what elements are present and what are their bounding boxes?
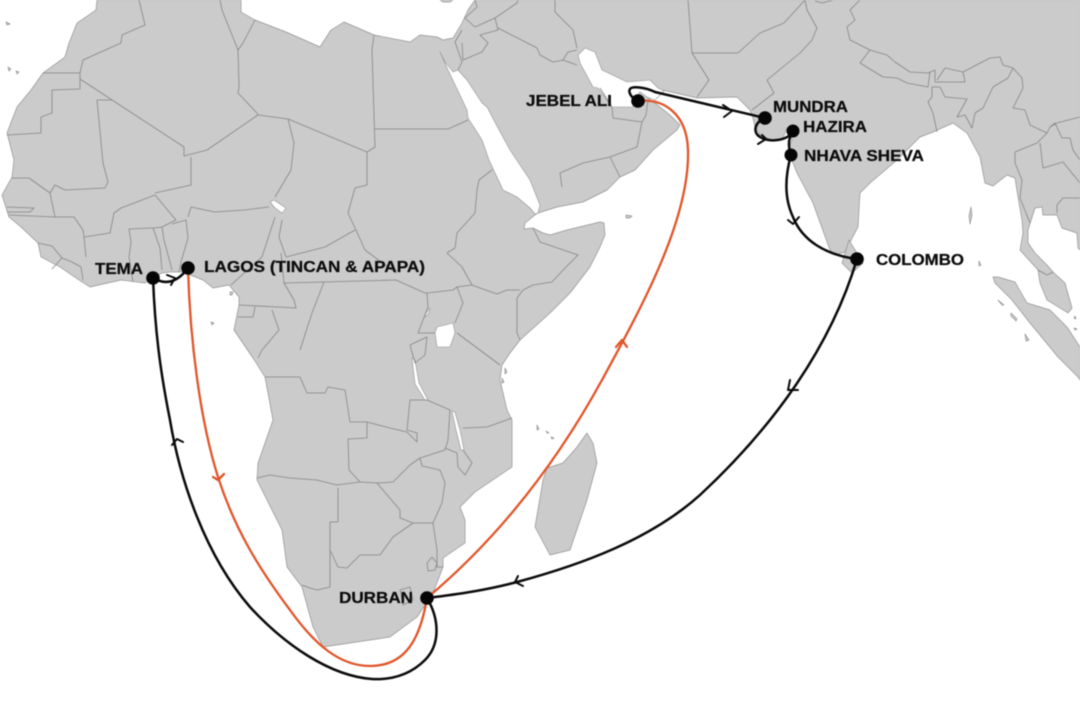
marker: Lagos (181, 261, 195, 275)
sea: Red Sea (440, 52, 540, 214)
route: orange service from Lagos via Durban to Jebel Ali (188, 101, 688, 666)
label: Hazira: HAZIRA (803, 119, 867, 136)
lake: Victoria (435, 323, 455, 347)
arrow: towards Mundra (723, 105, 732, 117)
arrow: northbound to Tema (172, 439, 183, 445)
label: Colombo: COLOMBO (876, 252, 964, 269)
lake: Malawi (452, 411, 464, 450)
label: Tema: TEMA (95, 261, 143, 278)
land: small islands (6, 0, 1077, 439)
marker: Mundra (758, 111, 772, 125)
marker: Tema (146, 271, 160, 285)
lake: Chad (270, 200, 286, 213)
arrow: approaching Durban (515, 576, 523, 586)
marker: Nhava Sheva (784, 148, 798, 162)
arrow: Tema to Lagos (167, 275, 175, 285)
label: Durban: DURBAN (339, 590, 413, 607)
arrow: towards Hazira (758, 135, 766, 144)
arrow: orange northbound (616, 340, 627, 347)
marker: Durban (420, 591, 434, 605)
label: Lagos: LAGOS (TINCAN & APAPA) (204, 259, 425, 276)
lake: Tanganyika (412, 358, 428, 400)
land: Sri Lanka (842, 240, 863, 273)
seas and lakes (270, 48, 664, 450)
sea: Persian Gulf (578, 48, 664, 107)
route: black service from Jebel Ali via India, Colombo and Durban to Lagos (153, 87, 857, 679)
label: Nhava Sheva: NHAVA SHEVA (804, 148, 924, 165)
marker: Hazira (786, 124, 800, 138)
port markers (146, 94, 864, 605)
land: Sumatra (993, 277, 1080, 380)
lake: Albert (425, 308, 430, 317)
label: Mundra: MUNDRA (773, 99, 848, 116)
arrow: towards Colombo (788, 217, 799, 224)
label: Jebel Ali: JEBEL ALI (526, 93, 612, 110)
port labels (95, 93, 964, 607)
arrow: orange southbound (213, 474, 224, 480)
marker: Colombo (850, 252, 864, 266)
land: Madagascar (535, 433, 597, 555)
marker: Jebel Ali (631, 94, 645, 108)
arrow: towards Durban from Colombo (788, 380, 798, 390)
